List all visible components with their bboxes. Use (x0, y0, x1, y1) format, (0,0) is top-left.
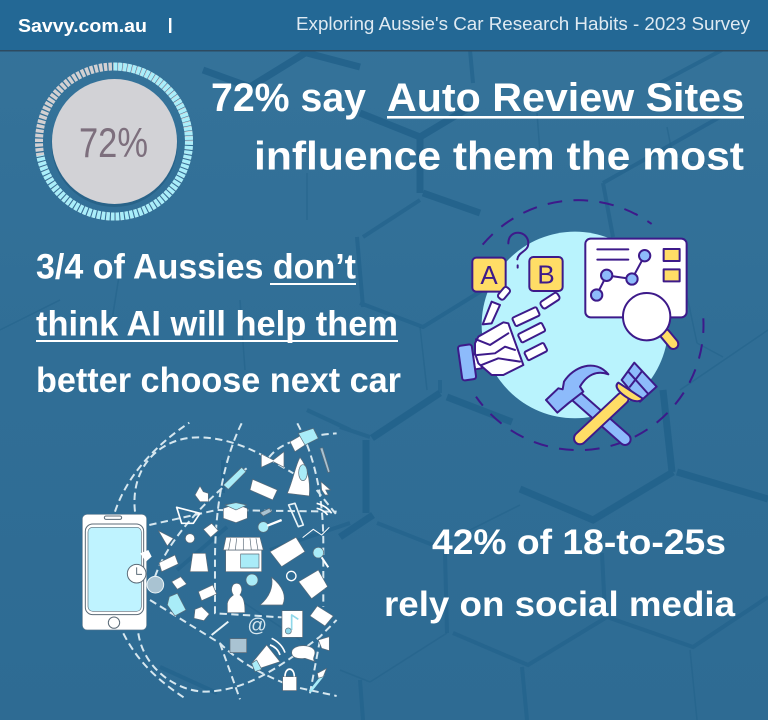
illustration: phone with connected services (82, 423, 337, 699)
icon: smartphone (82, 514, 164, 630)
gauge: 72 percent ring (39, 66, 189, 217)
dashed connections (115, 423, 337, 699)
dashed orbit (476, 200, 703, 450)
statement: social media (384, 523, 736, 624)
icon: option A (472, 258, 506, 292)
gauge value: 72% (79, 119, 148, 166)
icon: option B (529, 257, 563, 291)
statement: AI and next car (36, 248, 401, 400)
icon: storefront (223, 537, 263, 572)
icon: robot hand (458, 286, 561, 381)
headline: auto review sites: Auto Review Sites (387, 76, 744, 120)
icon: megaphone (252, 645, 280, 670)
statement: AI and next car: 3/4 of Aussies don’t (36, 248, 356, 286)
icon: line chart board (585, 239, 687, 317)
service icons (158, 428, 333, 692)
brand name: Savvy.com.au (18, 15, 147, 36)
statement: AI and next car: think AI will help them (36, 304, 398, 344)
icon: person (227, 583, 245, 613)
icon: puzzle (290, 435, 305, 452)
illustration: AI robot hand, chart and tools (458, 200, 703, 450)
headline: auto review sites: 72% say (211, 76, 367, 120)
icon: at sign: @ (247, 616, 267, 637)
icon: question mark (508, 233, 528, 268)
icon: crossed hammer and brush (546, 363, 657, 439)
statement: social media: 42% of 18-to-25s (432, 523, 726, 562)
icon: magnifying glass (623, 293, 673, 344)
statement: social media: rely on social media (384, 585, 736, 624)
survey title: Exploring Aussie's Car Research Habits - 2023 Survey (296, 13, 751, 34)
headline: auto review sites: influence them the most (254, 134, 744, 178)
pale blue disc (482, 232, 668, 418)
header bar (0, 0, 768, 52)
statement: AI and next car: better choose next car (36, 361, 401, 400)
icon: music file (282, 611, 303, 637)
icon: option B: B (537, 259, 555, 289)
header separator (169, 18, 171, 33)
icon: option A: A (480, 260, 498, 290)
headline: auto review sites (211, 76, 744, 178)
